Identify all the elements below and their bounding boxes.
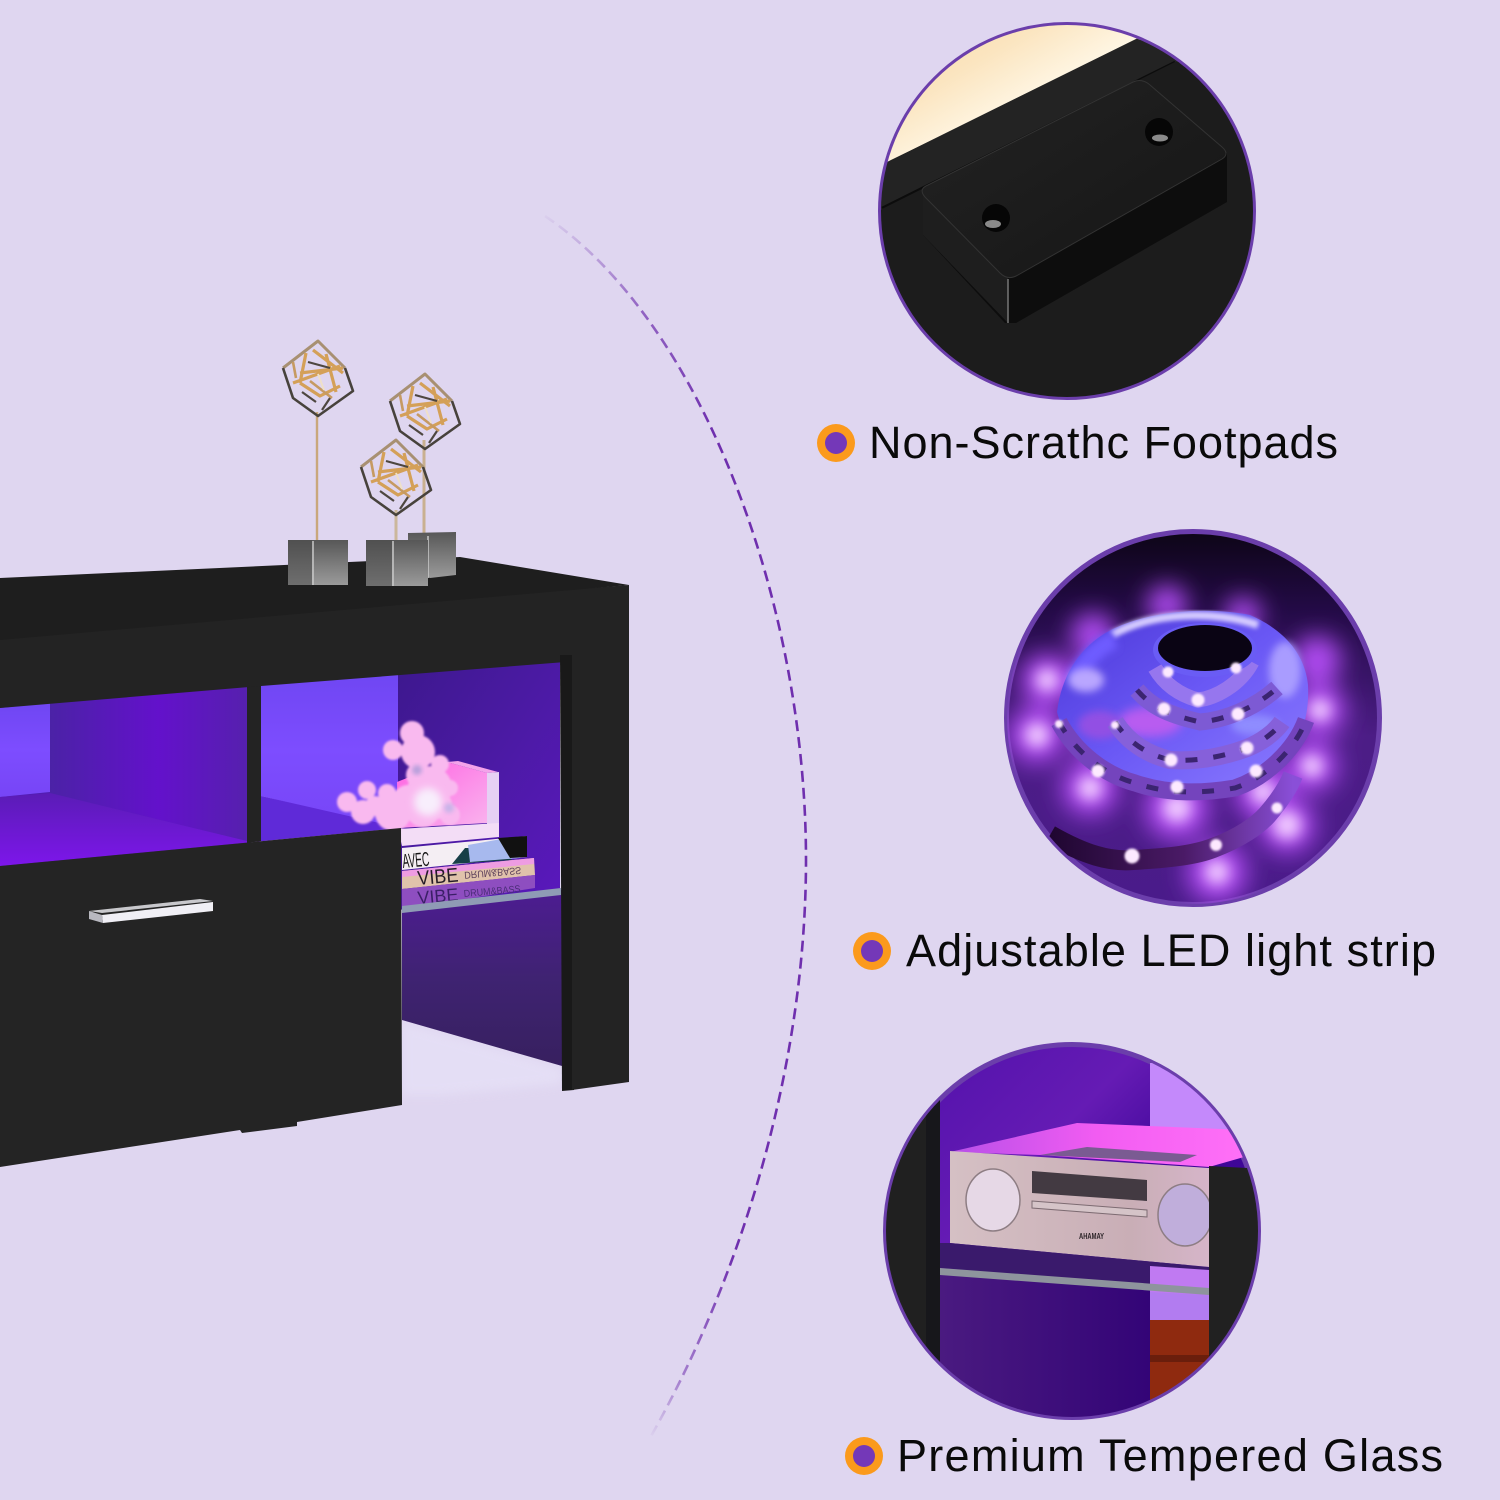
tape highlight xyxy=(1112,615,1258,635)
drawer handle xyxy=(89,899,213,923)
LED chips xyxy=(1055,662,1282,864)
soft LED glows xyxy=(1009,585,1346,902)
brand: AHAMAY xyxy=(1079,1232,1104,1241)
stems xyxy=(316,412,318,542)
top panel xyxy=(0,585,629,708)
glass shelf xyxy=(940,1243,1209,1295)
dashed arc divider xyxy=(545,216,806,1438)
cube ornaments xyxy=(283,341,460,586)
right leg xyxy=(560,650,629,1091)
books on glass shelf xyxy=(402,836,535,909)
lower purple panels xyxy=(940,1275,1150,1417)
lower tail of strip xyxy=(1050,775,1293,860)
left base xyxy=(288,540,348,585)
books on glass shelf: DRUM&BASS xyxy=(463,884,521,900)
inner glow reflections xyxy=(1118,707,1182,737)
books on glass shelf: DRUM&BASS xyxy=(464,864,522,880)
back light panel xyxy=(1150,1063,1228,1130)
dark frame band xyxy=(875,37,1190,210)
LED label: Adjustable LED light strip xyxy=(906,925,1436,976)
circle: tempered glass shelf xyxy=(883,1042,1261,1420)
screw holes xyxy=(982,204,1010,232)
books on glass shelf: VIBE xyxy=(417,884,459,908)
glow under stand xyxy=(402,1022,562,1095)
front base xyxy=(366,540,428,586)
stand interior back panels xyxy=(0,661,562,1066)
bullet xyxy=(845,1437,883,1475)
left post xyxy=(886,1100,940,1362)
tape bands xyxy=(1059,720,1306,792)
circle: LED strip xyxy=(1006,532,1380,904)
glass shelf xyxy=(402,888,561,913)
bullet xyxy=(853,932,891,970)
display xyxy=(1032,1171,1147,1201)
cream background xyxy=(888,25,1140,162)
circle: footpad detail xyxy=(870,15,1270,410)
divider post xyxy=(247,684,261,843)
bullet xyxy=(817,424,855,462)
center hole xyxy=(1153,623,1257,677)
speakers xyxy=(966,1169,1020,1231)
books on glass shelf: AVEC xyxy=(402,849,430,873)
surface xyxy=(881,62,1253,397)
disc slot xyxy=(1032,1201,1147,1217)
cube: right xyxy=(390,374,460,449)
printed circuit marks xyxy=(1059,688,1306,792)
footpad xyxy=(922,81,1227,323)
back base xyxy=(408,532,456,578)
right post xyxy=(1209,1166,1258,1357)
coral ornament xyxy=(337,721,499,846)
footpad label: Non-Scrathc Footpads xyxy=(869,417,1338,468)
drawer front xyxy=(0,828,402,1167)
cube: left xyxy=(283,341,353,416)
TV stand xyxy=(0,557,629,1167)
radio unit xyxy=(950,1123,1244,1267)
cube: front xyxy=(361,440,431,515)
outer tape surface xyxy=(1057,611,1308,791)
books on glass shelf: VIBE xyxy=(417,864,459,890)
glass label: Premium Tempered Glass xyxy=(897,1430,1443,1481)
strip coil xyxy=(1057,611,1308,792)
